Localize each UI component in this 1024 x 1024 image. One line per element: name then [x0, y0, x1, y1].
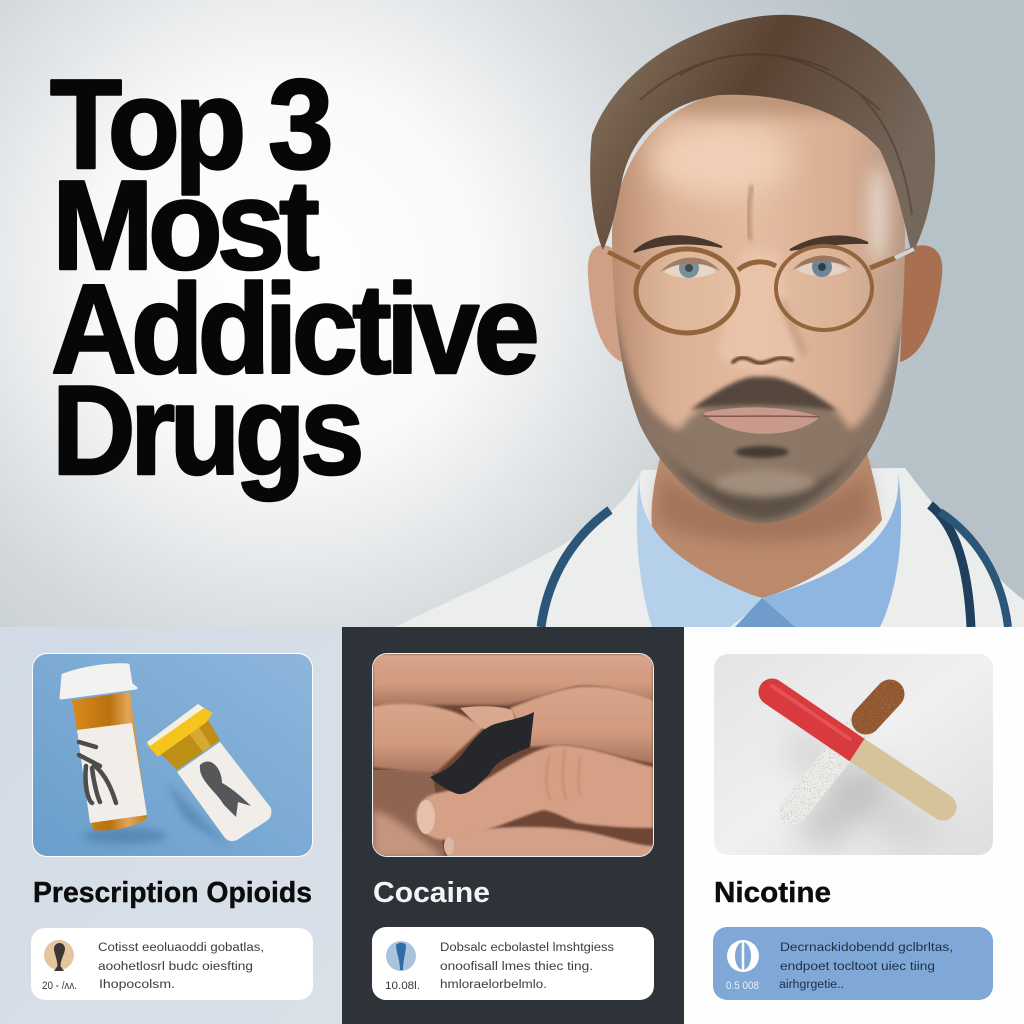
card text: airhgrgetie..: [779, 979, 844, 991]
icon: tan badge: [44, 940, 74, 971]
knuckle crease: [546, 750, 580, 800]
stat label: 0.5 008: [726, 980, 759, 992]
card text: Dobsalc ecbolastel lmshtgiess: [440, 942, 614, 954]
white coat: [395, 468, 1024, 627]
photo: crossed cigarettes: [714, 654, 993, 855]
left eyebrow: [634, 236, 722, 252]
thumbnail: [417, 800, 435, 834]
bottle 1: [61, 665, 147, 830]
card text: Decrnackidobendd gclbrltas,: [780, 942, 953, 954]
title: [50, 53, 536, 501]
right finger: [510, 686, 653, 763]
bottom finger: [447, 827, 653, 858]
title: Top 3: [50, 53, 330, 195]
card text: [779, 942, 953, 991]
left finger: [373, 704, 483, 772]
left shirt collar: [637, 472, 765, 627]
nose: [720, 254, 798, 364]
panel: nicotine: [713, 654, 993, 1000]
stat label: 20 - /ᴧᴧ.: [42, 980, 77, 992]
lips: [703, 407, 820, 434]
bottle 2: [147, 704, 271, 841]
big lower finger: [416, 745, 653, 840]
right shirt collar: [762, 472, 901, 627]
right eye: [793, 256, 852, 277]
card text: onoofisall lmes thiec ting.: [440, 961, 593, 973]
card text: [98, 942, 264, 991]
left ear: [588, 245, 622, 362]
face: [612, 88, 905, 524]
card text: aoohetlosrl budc oiesfting: [98, 961, 253, 973]
card text: hmloraelorbelmlo.: [440, 979, 547, 991]
panel: cocaine: [342, 627, 684, 1024]
card text: Ihopocolsm.: [99, 979, 175, 991]
stethoscope tubing: [541, 505, 1008, 627]
face shading and beard: [610, 84, 905, 540]
icon: blue badge: [386, 941, 416, 971]
title: Addictive: [51, 258, 536, 400]
left eye: [660, 258, 720, 278]
title: Drugs: [52, 359, 360, 501]
icon: white badge: [727, 940, 759, 972]
soul patch: [735, 446, 789, 458]
stat label: 10.08l.: [385, 980, 420, 992]
card: opioid stats: [31, 928, 313, 1000]
photo: hands: [372, 653, 654, 860]
hero background: [0, 0, 1024, 627]
cigarette: red and cream: [772, 686, 943, 807]
card text: Cotisst eeoluaoddi gobatlas,: [98, 942, 264, 954]
portrait: doctor with glasses: [395, 15, 1024, 627]
title: Most: [52, 154, 319, 296]
heading: prescription opioids: Prescription Opioids: [33, 877, 312, 909]
black shape: [430, 712, 534, 794]
hair: [590, 15, 935, 255]
card text: [440, 942, 614, 991]
card: nicotine stats: [713, 927, 993, 1000]
right ear: [900, 245, 942, 362]
neck shadow: [656, 470, 872, 542]
photo: pill bottles: [32, 653, 313, 857]
glasses: [608, 246, 914, 333]
top finger: [373, 654, 653, 705]
card text: endpoet tocltoot uiec tiing: [780, 961, 935, 973]
heading: cocaine: Cocaine: [373, 877, 490, 909]
panel: prescription opioids: [0, 627, 342, 1024]
lower left hand: [373, 770, 445, 860]
neck: [651, 450, 882, 598]
card: cocaine stats: [372, 927, 654, 1000]
cigarette: white with brown tip: [793, 694, 890, 811]
right eyebrow: [790, 236, 868, 250]
shirt button area: [735, 598, 795, 627]
centre knuckle: [460, 706, 515, 729]
heading: nicotine: Nicotine: [714, 877, 831, 909]
